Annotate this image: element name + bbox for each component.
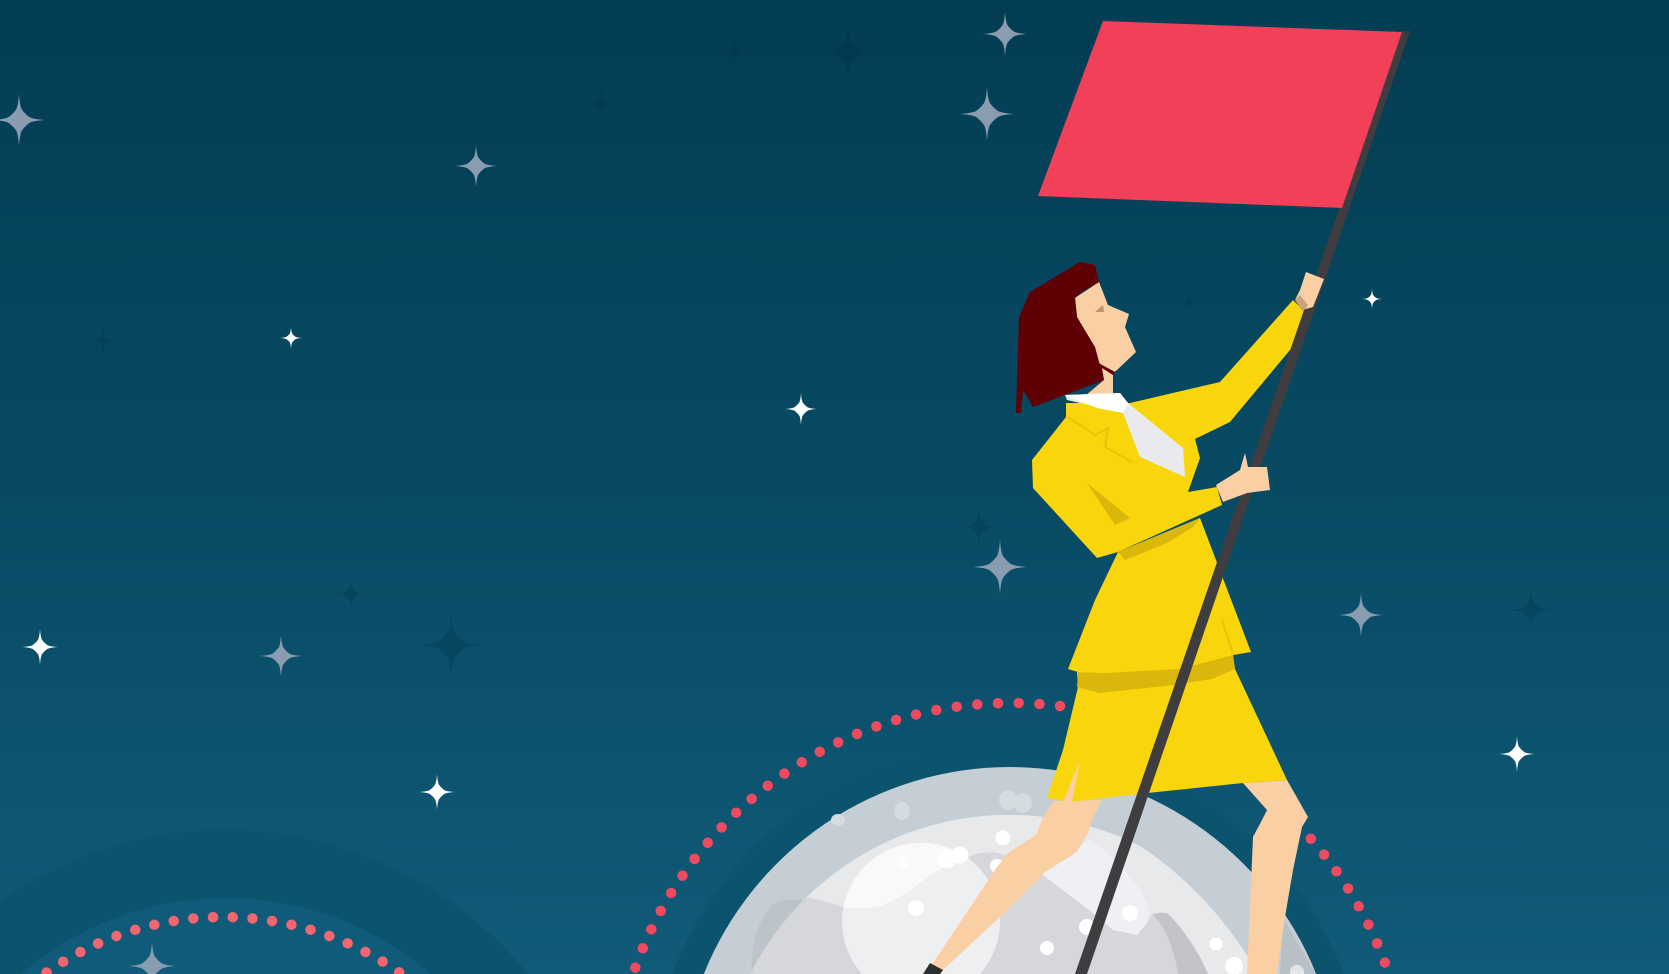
moon base disc [704, 767, 1316, 974]
small planet at bottom left with halo and dotted orbit [0, 830, 528, 974]
moon right shaded edge [1280, 918, 1316, 974]
jacket waist shadow [1118, 518, 1200, 560]
peplum fold [1222, 620, 1233, 654]
moon [704, 767, 1316, 974]
jacket lapel line [1068, 417, 1132, 462]
upper hand [1295, 272, 1324, 309]
blouse [1065, 393, 1185, 477]
shoe [923, 963, 943, 974]
woman [923, 31, 1410, 974]
hair [1016, 262, 1104, 413]
grey stars [0, 12, 1383, 677]
moon grey terrain middle [900, 852, 1207, 974]
moon left shaded patch [752, 900, 803, 974]
moon inner zone [750, 815, 1258, 974]
hair strand under jaw [1093, 360, 1115, 380]
neck and face [1075, 282, 1136, 396]
lower hand [1216, 453, 1270, 502]
dotted orbit around the moon [633, 703, 1389, 974]
moon craters white [897, 830, 1304, 974]
moon craters faint [831, 790, 1032, 826]
right leg [1243, 780, 1308, 974]
wrist [1295, 295, 1308, 312]
white stars [22, 289, 1535, 810]
moon pale zone behind right terrain [1030, 840, 1150, 940]
blouse collar [1065, 393, 1128, 413]
moon bright cloud [844, 843, 953, 908]
skirt shadow band [1077, 655, 1235, 693]
eye [1095, 305, 1104, 312]
jacket peplum [1068, 518, 1251, 673]
moon grey terrain left [750, 898, 862, 974]
jacket and arms [1032, 300, 1305, 558]
red flag [1038, 21, 1402, 208]
faint dark stars [90, 26, 1552, 677]
jacket sleeve fold [1087, 483, 1130, 525]
skirt [1047, 655, 1287, 802]
flag pole [1075, 31, 1410, 974]
moon halo [672, 742, 1344, 974]
left leg [923, 800, 1102, 974]
moon highlight disc [842, 842, 1000, 974]
skirt slit [1063, 760, 1080, 802]
moon dark terrain [1153, 913, 1208, 974]
